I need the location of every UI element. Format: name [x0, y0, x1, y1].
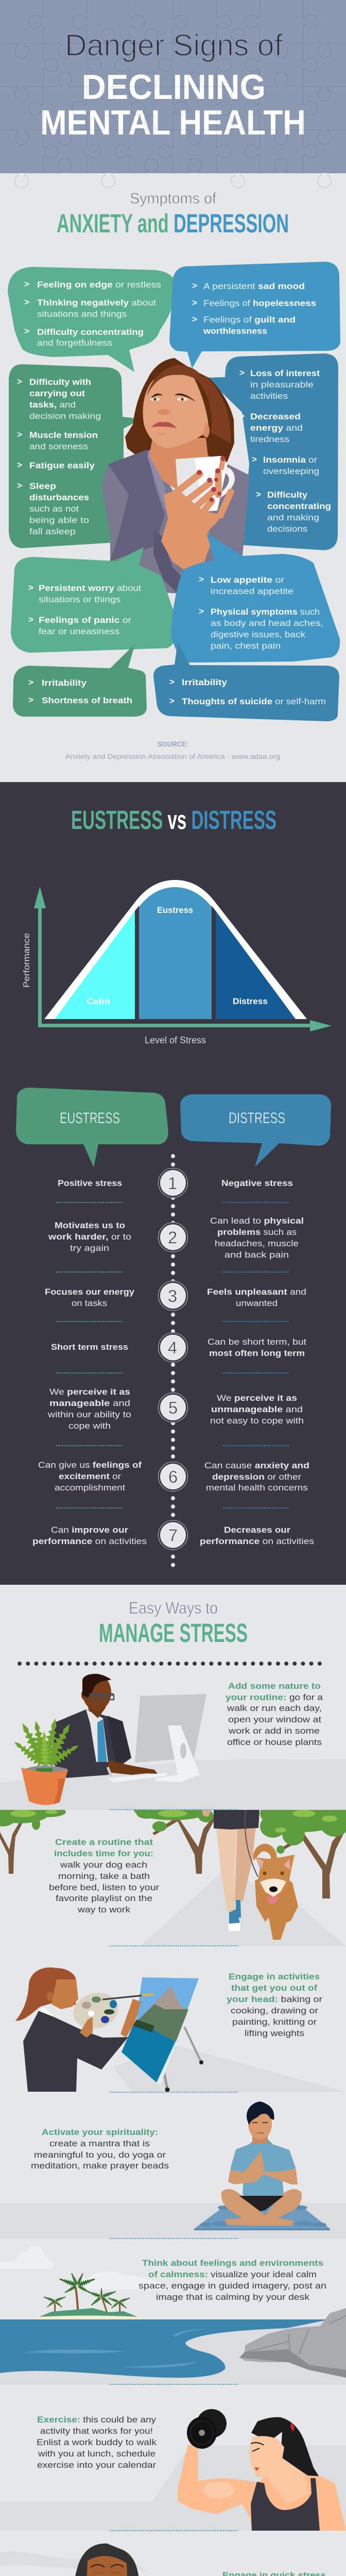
text: anxiety symptoms 1: Thinking negatively about: [37, 298, 156, 308]
text: add some nature: your routine: go for a: [226, 1692, 323, 1702]
text: distress column: not easy to cope with: [210, 1416, 304, 1426]
text: depression symptoms 3: as body and head aches,: [211, 618, 323, 628]
text: exercise: activity that works for you!: [40, 2426, 153, 2436]
text: depression symptoms 3: Low appetite or: [211, 575, 284, 585]
text: engage in activities: that get you out of: [231, 1983, 317, 1993]
bubble: anxiety 1: [8, 267, 177, 372]
text: anxiety symptoms 2: disturbances: [29, 493, 89, 502]
text: depression symptoms 2: Insomnia or: [263, 455, 317, 465]
text: distress column: Negative stress: [221, 1178, 293, 1188]
text: create a routine: [49, 1837, 159, 1914]
text: add some nature: office or house plants: [227, 1737, 322, 1747]
text: distress column: unmanageable and: [211, 1404, 303, 1414]
text: depression symptoms 2: >: [239, 411, 245, 421]
illustration: clouds and tropical island: [0, 2246, 346, 2384]
bubble: depression 1: [169, 262, 340, 368]
text: add some nature: open your window at: [228, 1715, 321, 1724]
text: distress column: mental health concerns: [206, 1483, 308, 1493]
text: anxiety symptoms 2: Muscle tension: [29, 430, 98, 440]
text: eustress column: [32, 1178, 147, 1546]
text: source: SOURCE:: [158, 740, 188, 748]
text: distress column: Can lead to physical: [210, 1216, 304, 1226]
text: anxiety symptoms 3: >: [28, 583, 33, 592]
chart: stress curve: [22, 880, 332, 1045]
text: activate your spirituality: meaningful to you, do yoga or: [34, 2150, 166, 2160]
text: depression symptoms 2: energy and: [250, 423, 303, 433]
illustration: woman holding a mug: [101, 358, 249, 594]
text: anxiety symptoms 1: Difficulty concentrating: [37, 327, 144, 337]
text: eustress column: Positive stress: [58, 1178, 122, 1188]
text: eustress column: try again: [70, 1243, 109, 1253]
text: depression symptoms 4: Thoughts of suicide or self-harm: [182, 697, 326, 706]
number badge 6: 6: [168, 1467, 178, 1486]
text: depression symptoms 2: concentrating: [267, 501, 331, 511]
text: distress column: most often long term: [209, 1348, 305, 1358]
text: anxiety symptoms 2: >: [17, 460, 22, 470]
number badge 5: [158, 1392, 188, 1423]
text: anxiety symptoms 3: Feelings of panic or: [39, 615, 131, 625]
text: anxiety symptoms 3: [28, 583, 141, 636]
text: engage in activities: Engage in activities: [229, 1972, 320, 1981]
text: think about feelings: image that is calming by your desk: [156, 2292, 310, 2302]
text: activate your spirituality: [31, 2127, 169, 2171]
text: source: [65, 740, 280, 760]
text: depression symptoms 3: increased appetite: [211, 586, 293, 596]
heading: eustress vs distress: EUSTRESS vs DISTRESS: [71, 805, 276, 835]
heading: easy ways to manage stress: Easy Ways to: [129, 1599, 218, 1617]
text: distress column: problems such as: [217, 1227, 297, 1237]
text: distress column: Can be short term, but: [207, 1337, 306, 1347]
number badge 4: [158, 1332, 188, 1363]
text: eustress column: Can improve our: [51, 1525, 128, 1535]
text: anxiety symptoms 4: >: [28, 677, 33, 687]
bubble: depression 4: [153, 642, 339, 721]
panel: front bubbles: [8, 262, 340, 721]
text: depression symptoms 2: in pleasurable: [250, 380, 314, 389]
text: distress column: [200, 1178, 314, 1546]
text: create a routine: walk your dog each: [60, 1860, 147, 1870]
text: depression symptoms 2: [239, 368, 331, 534]
text: anxiety symptoms 4: [28, 677, 132, 705]
number badge 2: 2: [168, 1228, 177, 1247]
text: anxiety symptoms 2: fall asleep: [29, 527, 76, 536]
number badge 7: 7: [168, 1526, 178, 1545]
text: depression symptoms 3: >: [199, 606, 204, 616]
bubble: anxiety 2: [9, 364, 141, 548]
text: think about feelings: space, engage in guided imagery, post an: [139, 2281, 326, 2291]
text: anxiety symptoms 4: >: [28, 695, 33, 705]
text: distress column: performance on activities: [200, 1536, 314, 1546]
number badge 2: [158, 1222, 188, 1252]
text: depression symptoms 3: digestive issues, back: [211, 630, 306, 639]
text: anxiety symptoms 2: being able to: [29, 515, 89, 525]
illustration: man at computer with fern: [11, 1674, 206, 1805]
text: create a routine: way to work: [77, 1905, 131, 1914]
text: eustress column: cope with: [68, 1421, 111, 1431]
text: anxiety symptoms 1: >: [24, 279, 29, 289]
bubble: anxiety 4: [13, 644, 147, 717]
label: calm zone: Calm: [86, 996, 110, 1006]
text: distress column: depression or other: [212, 1472, 301, 1482]
text: anxiety symptoms 1: [24, 279, 161, 348]
number badge 3: [158, 1281, 188, 1311]
text: anxiety symptoms 3: situations or things: [39, 595, 120, 604]
text: depression symptoms 1: >: [192, 298, 197, 308]
title: danger signs of: Danger Signs of: [65, 28, 283, 62]
heading: symptoms of anxiety and depression: ANXIETY and DEPRESSION: [57, 209, 289, 238]
text: depression symptoms 1: Feelings of guilt and: [203, 315, 296, 325]
text: create a routine: favorite playlist on the: [56, 1893, 152, 1903]
text: exercise: with you at lunch, schedule: [38, 2449, 155, 2459]
text: eustress column: Short term stress: [51, 1342, 128, 1352]
text: depression symptoms 2: decisions: [267, 524, 307, 534]
text: anxiety symptoms 2: >: [17, 481, 22, 490]
text: engage in activities: lifting weights: [245, 2028, 304, 2038]
text: anxiety symptoms 2: [17, 377, 101, 536]
illustration: trees in the park: [0, 1810, 346, 1899]
text: source: Anxiety and Depression Association of America - www.adaa.org: [65, 752, 280, 760]
bubble: depression 2: [206, 353, 338, 550]
text: create a routine: Create a routine that: [55, 1837, 153, 1847]
text: depression symptoms 4: Irritability: [182, 677, 228, 687]
text: add some nature: walk or run each day,: [227, 1703, 322, 1713]
text: create a routine: morning, take a bath: [58, 1871, 150, 1881]
text: create a routine: includes time for you:: [54, 1849, 153, 1858]
text: activate your spirituality: create a mantra that is: [49, 2139, 150, 2148]
text: anxiety symptoms 4: Shortness of breath: [42, 696, 132, 705]
text: distress column: Feels unpleasant and: [207, 1287, 306, 1297]
label: eustress zone: Eustress: [157, 905, 193, 915]
bubble: anxiety 3: [11, 547, 175, 653]
bubble: distress header: [180, 1094, 331, 1167]
text: depression symptoms 2: Decreased: [250, 412, 301, 421]
text: depression symptoms 2: oversleeping: [263, 466, 319, 476]
text: activate your spirituality: meditation, make prayer beads: [31, 2161, 169, 2171]
text: distress column: Can cause anxiety and: [204, 1461, 309, 1470]
text: anxiety symptoms 2: >: [17, 430, 22, 439]
text: think about feelings: Think about feelings and environments: [142, 2258, 323, 2268]
text: exercise: [37, 2415, 157, 2470]
label: distress zone: Distress: [233, 996, 268, 1006]
text: eustress column: Motivates us to: [55, 1221, 125, 1230]
text: anxiety symptoms 3: fear or uneasiness: [39, 626, 119, 636]
text: depression symptoms 2: >: [239, 368, 245, 378]
text: think about feelings: [139, 2258, 326, 2302]
text: anxiety symptoms 4: Irritability: [42, 678, 87, 688]
text: depression symptoms 3: Physical symptoms such: [211, 607, 320, 617]
number badge 1: [158, 1167, 188, 1198]
text: depression symptoms 4: [169, 677, 326, 706]
title: mental health: MENTAL HEALTH: [40, 103, 306, 142]
illustration: person meditating on mat: [194, 2102, 330, 2230]
heading: easy ways to manage stress: [99, 1599, 248, 1648]
text: activate your spirituality: Activate your spirituality:: [42, 2127, 158, 2137]
text: anxiety symptoms 2: >: [17, 377, 22, 386]
text: depression symptoms 2: Difficulty: [267, 490, 308, 500]
text: anxiety symptoms 1: >: [24, 297, 29, 307]
label: performance axis: Performance: [22, 933, 31, 988]
text: engage in activities: your head: baking or: [227, 1994, 322, 2004]
panel: eustress vs distress: [0, 782, 346, 1585]
illustration: woman lifting dumbbell: [178, 2409, 346, 2531]
heading: symptoms of anxiety and depression: [57, 190, 289, 238]
text: distress column: headaches, muscle: [215, 1239, 299, 1248]
text: depression symptoms 1: >: [192, 281, 197, 291]
text: anxiety symptoms 2: such as not: [29, 504, 79, 514]
panel: header: [0, 0, 346, 188]
heading: symptoms of anxiety and depression: Symptoms of: [130, 190, 217, 207]
text: depression symptoms 3: >: [199, 574, 204, 584]
text: eustress column: work harder, or to: [48, 1232, 131, 1242]
text: depression symptoms 2: activities: [250, 391, 288, 401]
text: eustress column: within our ability to: [47, 1410, 131, 1419]
text: distress column: Decreases our: [224, 1525, 290, 1535]
label: level of stress axis: Level of Stress: [145, 1035, 206, 1045]
text: depression symptoms 2: >: [256, 489, 261, 499]
text: eustress column: on tasks: [72, 1298, 107, 1308]
title: declining: DECLINING: [82, 67, 266, 107]
text: anxiety symptoms 1: Feeling on edge or restless: [37, 280, 161, 290]
text: engage in activities: [227, 1972, 322, 2038]
text: add some nature: [226, 1681, 323, 1747]
illustration: woman relaxing with waves: [0, 2544, 346, 2576]
text: anxiety symptoms 2: decision making: [29, 411, 101, 421]
panel: bubble backs beside woman: [9, 353, 338, 550]
illustration: woman painting at easel: [15, 1968, 203, 2092]
text: exercise: Exercise: this could be any: [37, 2415, 157, 2425]
text: engage in activities: cooking, drawing or: [231, 2006, 318, 2015]
number badge 4: 4: [168, 1338, 177, 1357]
text: anxiety symptoms 2: Difficulty with: [29, 377, 91, 387]
illustration: woman walking dog: [202, 1810, 298, 1940]
text: depression symptoms 1: >: [192, 314, 197, 324]
bubble: eustress header: EUSTRESS: [60, 1110, 120, 1127]
axes with arrows: [34, 887, 332, 1031]
text: distress column: We perceive it as: [217, 1393, 297, 1403]
text: think about feelings: of calmness: visualize your ideal calm: [148, 2269, 317, 2279]
text: anxiety symptoms 3: >: [28, 615, 33, 624]
text: eustress column: Can give us feelings of: [38, 1460, 142, 1470]
text: depression symptoms 4: >: [169, 677, 175, 687]
text: depression symptoms 3: pain, chest pain: [211, 641, 281, 651]
number badge 1: 1: [168, 1174, 177, 1193]
text: anxiety symptoms 1: situations and things: [37, 309, 127, 319]
text: eustress column: manageable and: [49, 1398, 130, 1408]
text: depression symptoms 1: [192, 281, 316, 336]
text: anxiety symptoms 1: and forgetfulness: [37, 338, 112, 348]
text: depression symptoms 2: >: [252, 454, 257, 464]
text: anxiety symptoms 3: Persistent worry about: [39, 583, 141, 593]
text: anxiety symptoms 2: Fatigue easily: [29, 461, 95, 470]
text: anxiety symptoms 2: carrying out: [29, 388, 85, 398]
text: depression symptoms 1: Feelings of hopelessness: [203, 298, 316, 308]
text: anxiety symptoms 2: tasks, and: [29, 400, 76, 410]
text: eustress column: We perceive it as: [49, 1387, 130, 1397]
text: exercise: Enlist a work buddy to walk: [37, 2437, 157, 2447]
number badge 5: 5: [168, 1398, 178, 1417]
text: engage in activities: painting, knitting or: [232, 2017, 317, 2027]
text: anxiety symptoms 2: and soreness: [29, 442, 88, 451]
text: add some nature: Add some nature to: [228, 1681, 321, 1691]
text: eustress column: performance on activities: [32, 1536, 147, 1546]
text: exercise: exercise into your calendar: [37, 2460, 156, 2470]
text: anxiety symptoms 1: >: [24, 326, 29, 336]
text: depression symptoms 2: tiredness: [250, 434, 289, 444]
text: anxiety symptoms 2: Sleep: [29, 481, 56, 491]
text: create a routine: before bed, listen to your: [49, 1883, 159, 1892]
text: distress column: and back pain: [224, 1250, 289, 1260]
text: distress column: unwanted: [236, 1298, 278, 1308]
number badge 3: 3: [168, 1286, 177, 1306]
text: depression symptoms 2: and making: [267, 513, 319, 522]
text: depression symptoms 3: [199, 574, 323, 651]
number badge 6: [158, 1461, 188, 1492]
bubble: eustress header: [16, 1088, 168, 1167]
heading: easy ways to manage stress: MANAGE STRESS: [99, 1618, 248, 1648]
text: eustress column: excitement or: [59, 1471, 121, 1481]
bubble: depression 3: [171, 533, 340, 663]
text: eustress column: accomplishment: [55, 1483, 125, 1493]
text: eustress column: Focuses our energy: [45, 1287, 135, 1297]
text: add some nature: work or add in some: [228, 1726, 320, 1736]
text: depression symptoms 1: A persistent sad mood: [203, 281, 305, 291]
text: depression symptoms 2: Loss of interest: [250, 368, 320, 378]
number badge 7: [158, 1520, 188, 1550]
text: depression symptoms 1: worthlessness: [203, 326, 267, 336]
text: depression symptoms 4: >: [169, 696, 175, 706]
bubble: distress header: DISTRESS: [229, 1110, 285, 1127]
